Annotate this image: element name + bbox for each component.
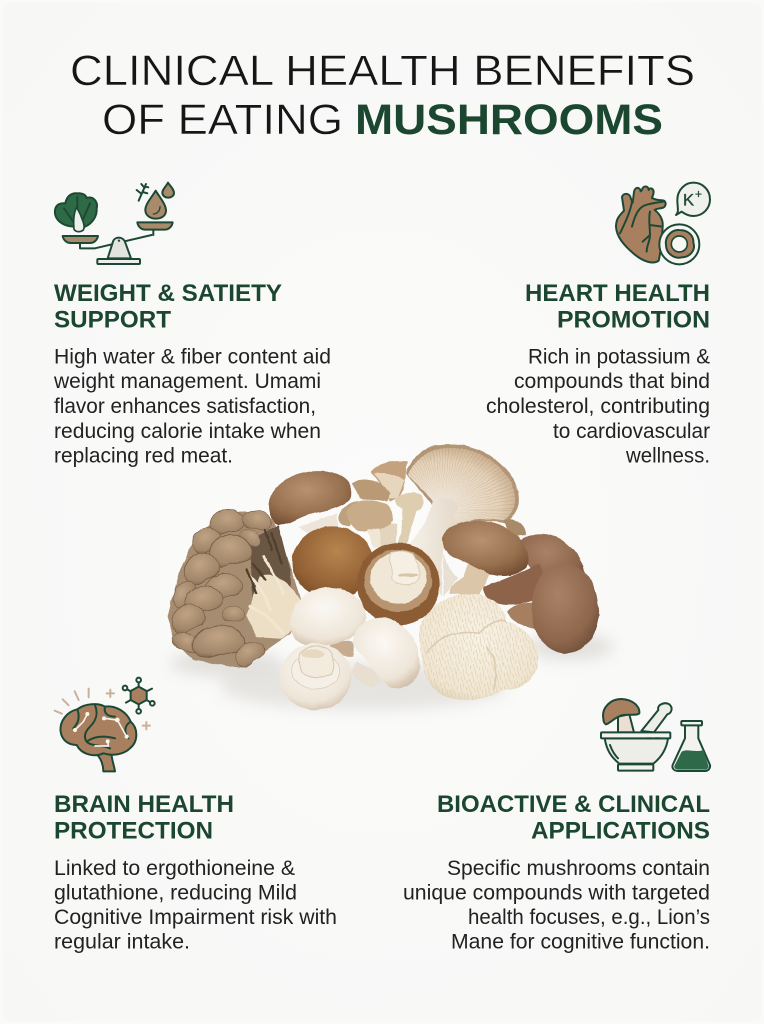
title: OF EATING: [102, 97, 343, 144]
heading: bioactive and clinical applications: BIOACTIVE & CLINICAL: [437, 791, 710, 818]
text block: brain health: glutathione, reducing Mild: [54, 882, 297, 904]
text block: heart health: wellness.: [625, 445, 710, 468]
icon: heart with potassium bubble and artery: K: [683, 191, 694, 210]
text block: brain health: [54, 857, 337, 954]
small oyster cluster: [338, 461, 423, 547]
text block: brain health: regular intake.: [54, 930, 190, 954]
white button mushroom: [290, 587, 366, 646]
text block: weight and satiety: reducing calorie intake when: [54, 420, 321, 443]
icon: heart with potassium bubble and artery: [616, 183, 710, 264]
text block: heart health: to cardiovascular: [553, 420, 710, 443]
text block: weight and satiety: flavor enhances satisfaction,: [54, 395, 316, 418]
icon: heart with potassium bubble and artery: +: [695, 187, 702, 201]
text block: heart health: cholesterol, contributing: [486, 395, 710, 418]
text block: bioactive and clinical: Mane for cognitive function.: [451, 930, 710, 954]
big shiitake cap and stem: [507, 564, 599, 653]
large oyster mushroom: [397, 444, 527, 597]
text block: brain health: Linked to ergothioneine &: [54, 857, 295, 880]
cremini mushroom underside: [357, 543, 440, 625]
heading: bioactive and clinical applications: APPLICATIONS: [531, 818, 710, 844]
icon: balance scale with greens and water drops: [55, 183, 174, 264]
lion's mane mushroom: [419, 594, 538, 700]
heading: brain health protection: BRAIN HEALTH: [54, 791, 234, 818]
white mushroom side view: [352, 618, 420, 688]
text block: brain health: Cognitive Impairment risk with: [54, 906, 337, 929]
heading: heart health promotion: HEART HEALTH: [525, 280, 710, 307]
text block: heart health: Rich in potassium &: [528, 346, 710, 368]
heading: brain health protection: PROTECTION: [54, 818, 213, 844]
text block: weight and satiety: weight management. Umami: [53, 370, 321, 393]
text block: weight and satiety: High water & fiber content aid: [54, 346, 331, 368]
text block: heart health: [486, 346, 710, 468]
heading: heart health promotion: PROMOTION: [557, 306, 710, 334]
rear shiitake caps: [483, 534, 585, 605]
heading: weight and satiety support: SUPPORT: [54, 306, 171, 334]
title: MUSHROOMS: [355, 97, 663, 144]
text block: bioactive and clinical: [403, 857, 710, 954]
text block: weight and satiety: [53, 346, 331, 468]
centre shiitake mushroom: [442, 521, 529, 597]
text block: bioactive and clinical: unique compounds with targeted: [403, 882, 710, 904]
text block: weight and satiety: replacing red meat.: [54, 445, 233, 468]
title: [70, 48, 695, 144]
brown cremini mushroom: [269, 471, 352, 536]
heading: brain health protection: [54, 791, 234, 844]
maitake mushroom cluster: [167, 507, 302, 670]
white mushroom underside: [280, 643, 351, 710]
text block: bioactive and clinical: Specific mushrooms contain: [447, 857, 710, 880]
icon: brain with molecule: [55, 678, 155, 771]
round brown mushroom cap: [292, 526, 373, 598]
title: CLINICAL HEALTH BENEFITS: [70, 48, 695, 95]
heading: weight and satiety support: WEIGHT & SATIETY: [54, 280, 282, 307]
text block: bioactive and clinical: health focuses, e.g., Lion’s: [468, 906, 710, 929]
heading: weight and satiety support: [54, 280, 282, 334]
heading: heart health promotion: [525, 280, 710, 334]
text block: heart health: compounds that bind: [514, 370, 710, 393]
heading: bioactive and clinical applications: [437, 791, 710, 844]
photo: pile of assorted mushrooms: [167, 444, 613, 710]
icon: mortar, mushroom and flask: [601, 699, 710, 771]
